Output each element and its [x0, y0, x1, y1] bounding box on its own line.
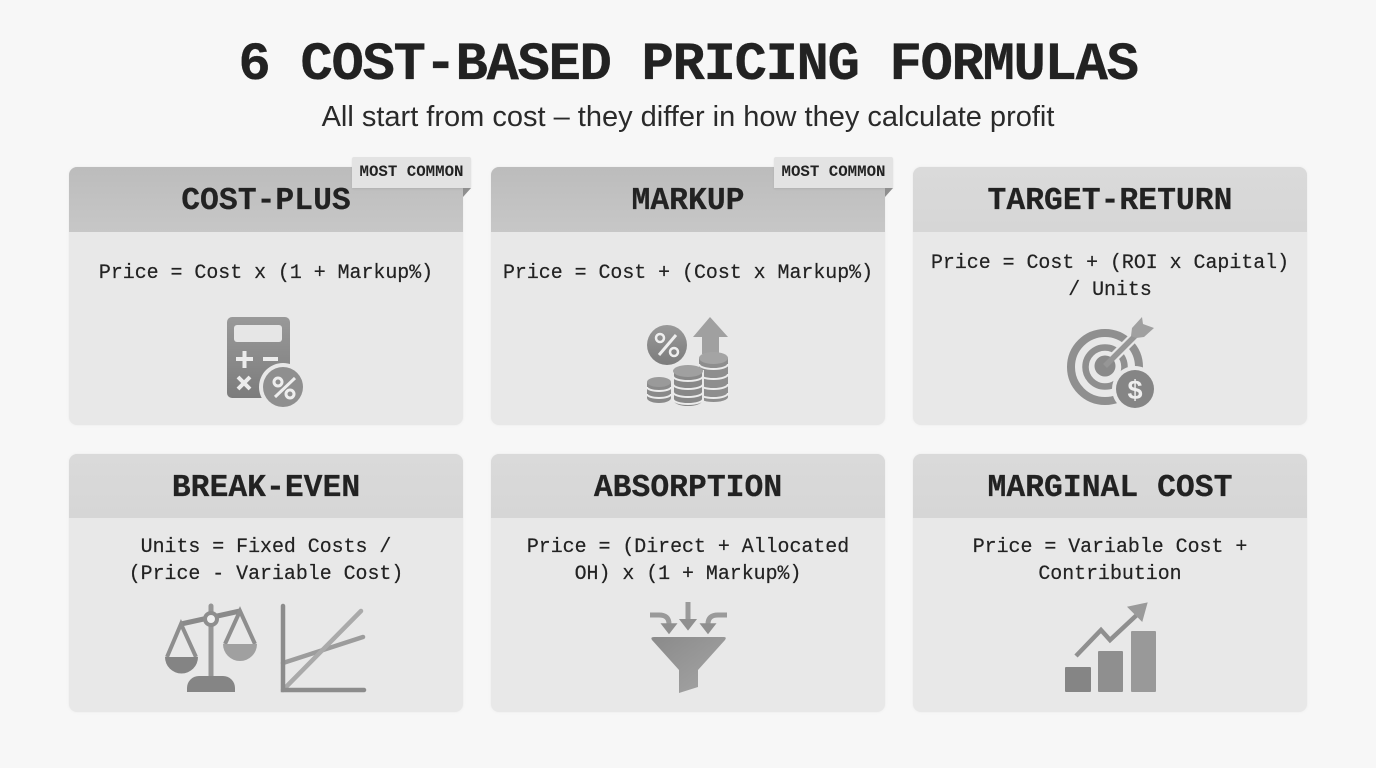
subtitle: All start from cost – they differ in how they calculate profit [322, 101, 1054, 133]
formula: break-even [129, 534, 403, 584]
right coin stack [699, 352, 728, 402]
middle coin stack [673, 365, 703, 407]
panel: break-even [69, 454, 463, 712]
heading: absorption: ABSORPTION [594, 471, 782, 506]
panel: markup [491, 167, 885, 425]
formula: marginal cost: Contribution [1038, 562, 1182, 584]
icon: coins with percent and up arrow [647, 317, 728, 407]
badge: most common: MOST COMMON [360, 163, 463, 181]
panel: marginal cost [913, 454, 1307, 712]
formula: markup: Price = Cost + (Cost x Markup%) [503, 261, 873, 284]
heading: cost-plus: COST-PLUS [181, 184, 351, 219]
badge fold [463, 188, 471, 197]
formula: target-return: / Units [1068, 278, 1152, 300]
icon: calculator with percent [227, 317, 307, 411]
panel: target-return [913, 167, 1307, 425]
heading: cost-plus [69, 167, 463, 232]
formula: target-return: Price = Cost + (ROI x Capital) [931, 250, 1289, 274]
panel: absorption [491, 454, 885, 712]
formula: absorption: OH) x (1 + Markup%) [575, 562, 801, 584]
formula: absorption [527, 534, 849, 584]
icon: target with arrow and dollar [1071, 317, 1158, 412]
badge fold [885, 188, 893, 197]
icon: funnel with inflow arrows [650, 602, 727, 693]
badge: most common: MOST COMMON [782, 163, 885, 181]
formula: cost-plus: Price = Cost x (1 + Markup%) [99, 261, 433, 284]
heading: markup [491, 167, 885, 232]
left coin stack [647, 377, 671, 403]
panel: cost-plus [69, 167, 463, 425]
heading: marginal cost: MARGINAL COST [988, 471, 1232, 506]
badge: most common [774, 157, 893, 188]
heading: absorption [491, 454, 885, 518]
formula: marginal cost [973, 534, 1247, 584]
heading: markup: MARKUP [631, 184, 745, 219]
formula: target-return [931, 250, 1289, 300]
heading: marginal cost [913, 454, 1307, 518]
title: 6 COST-BASED PRICING FORMULAS [238, 35, 1138, 96]
formula: break-even: Units = Fixed Costs / [141, 534, 391, 558]
icon: target with arrow and dollar: $ [1127, 375, 1143, 405]
badge: most common [352, 157, 471, 188]
icon: break-even chart [283, 606, 364, 690]
formula: marginal cost: Price = Variable Cost + [973, 534, 1247, 558]
heading: target-return: TARGET-RETURN [988, 184, 1232, 219]
formula: break-even: (Price - Variable Cost) [129, 562, 403, 584]
heading: break-even [69, 454, 463, 518]
heading: break-even: BREAK-EVEN [172, 471, 360, 506]
icon: balance scale [165, 606, 257, 692]
formula: absorption: Price = (Direct + Allocated [527, 534, 849, 558]
icon: rising bars with arrow [1065, 603, 1156, 692]
heading: target-return [913, 167, 1307, 232]
